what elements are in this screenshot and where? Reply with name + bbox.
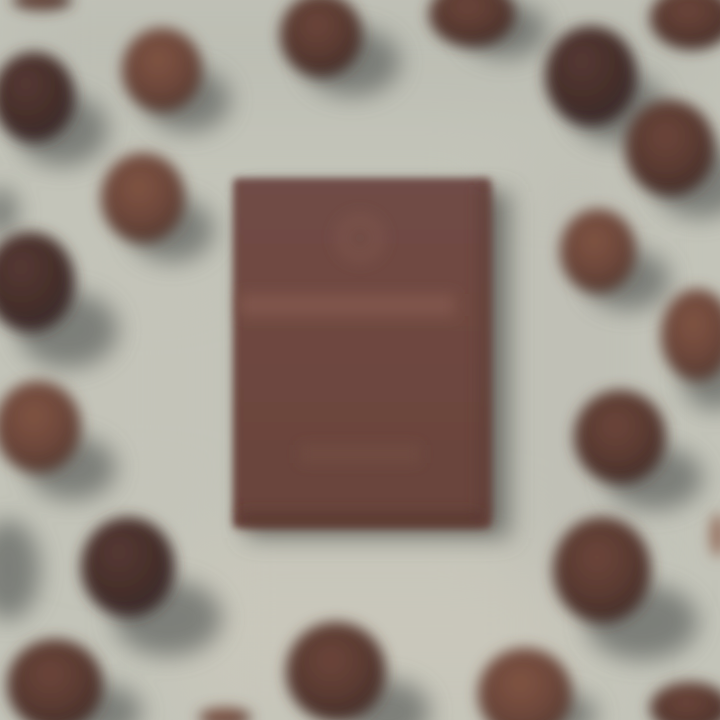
bar embossed band	[240, 185, 491, 526]
chocolate bar	[233, 178, 491, 528]
bar shadow	[246, 192, 510, 538]
